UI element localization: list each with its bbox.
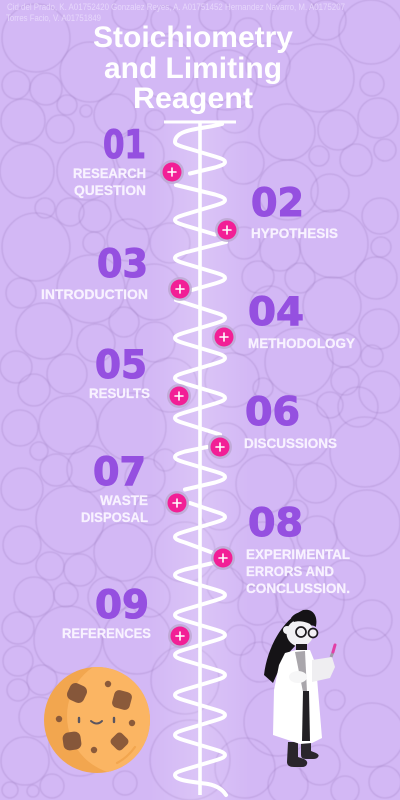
title: Stoichiometry [93,21,293,54]
section 08: experimental errors: CONCLUSSION. [246,580,350,596]
section 03: introduction: INTRODUCTION [41,286,148,302]
section 02: hypothesis [215,181,338,242]
section 05: results [89,343,191,408]
section 04: methodology [212,290,356,351]
section 08: experimental errors: ERRORS AND [246,563,334,579]
section 04: methodology: METHODOLOGY [248,335,356,351]
helix timeline [164,122,236,795]
section 06: discussions: DISCUSSIONS [244,435,337,451]
section 01: research question: QUESTION [74,182,146,198]
section 01: research question [73,123,184,198]
section 01: research question: 01 [103,123,146,168]
section 04: methodology: 04 [248,290,304,335]
title [93,21,293,115]
section 01: research question: RESEARCH [73,165,146,181]
icon: scientist [264,610,335,767]
section 05: results: RESULTS [89,385,150,401]
authors: Cid del Prado, K. A01752420 Gonzalez Reyes, A. A01751452 Hernandez Navarro, M. A0175207 [7,2,345,12]
section 02: hypothesis: HYPOTHESIS [251,225,338,241]
icon: cookie [44,667,150,773]
section 09: references: 09 [95,583,149,628]
section 05: results: 05 [95,343,147,388]
section 07: waste disposal: DISPOSAL [81,509,148,525]
section 08: experimental errors: EXPERIMENTAL [246,546,350,562]
section 09: references [62,583,192,648]
section 08: experimental errors [211,501,350,596]
section 03: introduction [41,242,192,302]
section 07: waste disposal [81,450,189,525]
section 06: discussions: 06 [245,390,300,435]
authors [6,2,345,23]
section 08: experimental errors: 08 [248,501,303,546]
section 02: hypothesis: 02 [251,181,304,226]
section 09: references: REFERENCES [62,625,151,641]
section 06: discussions [208,390,337,459]
authors: Torres Facio, V. A01751849 [6,13,101,23]
section 03: introduction: 03 [97,242,148,287]
section 07: waste disposal: 07 [93,450,146,495]
title: Reagent [133,82,253,115]
section 07: waste disposal: WASTE [100,492,148,508]
title: and Limiting [104,52,282,85]
